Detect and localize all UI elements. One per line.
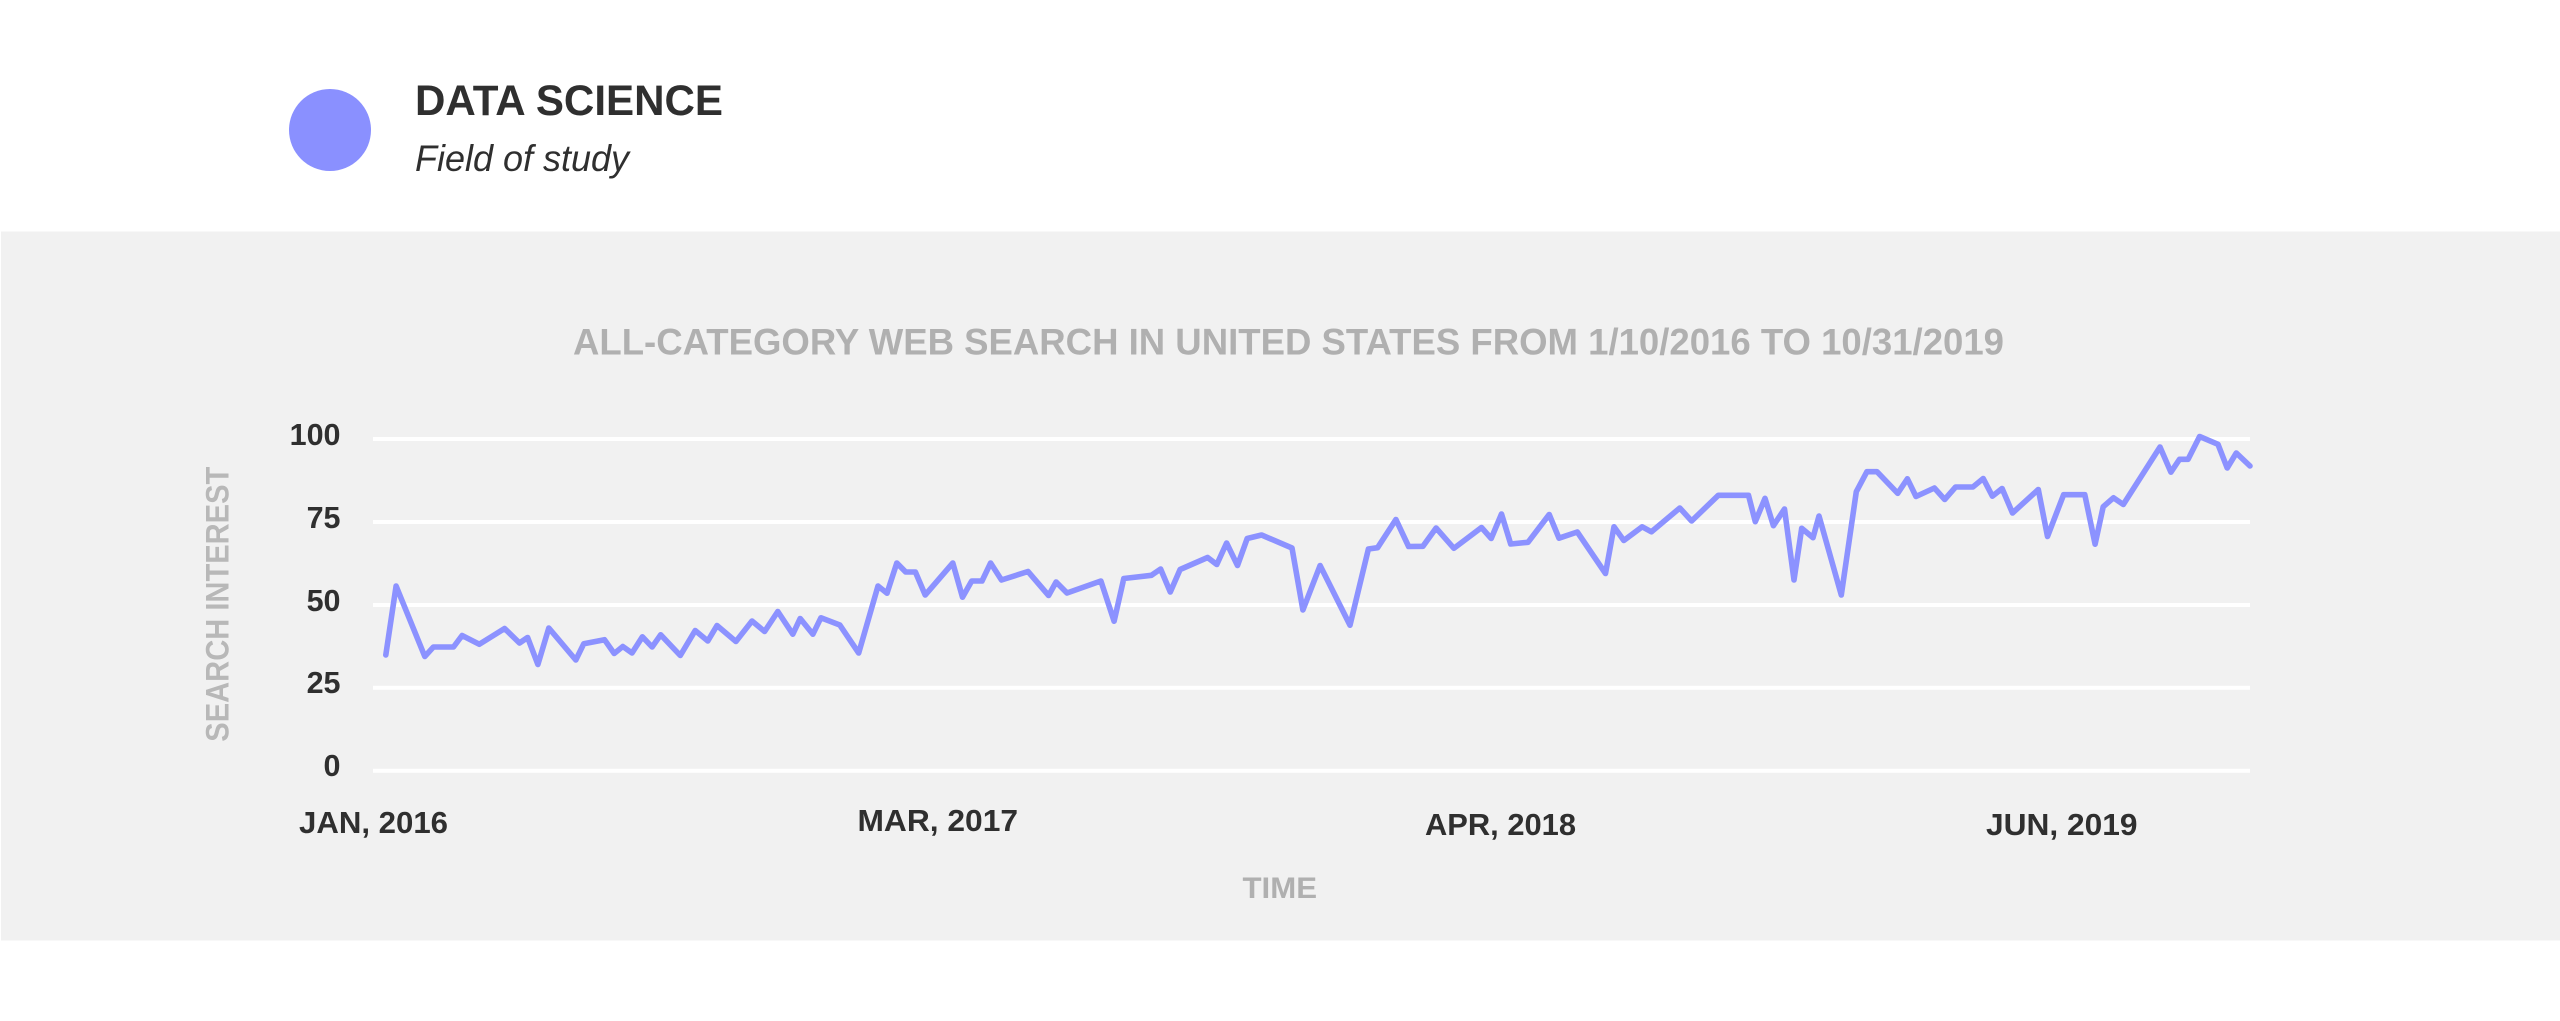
y-axis tick labels <box>290 418 341 783</box>
y-axis title: SEARCH INTEREST <box>200 466 236 742</box>
chart title: ALL-CATEGORY WEB SEARCH IN UNITED STATES FROM 1/10/2016 TO 10/31/2019 <box>573 320 2004 362</box>
y-axis tick labels: 100 <box>290 418 340 452</box>
x-axis tick labels: JAN, 2016 <box>299 806 448 840</box>
y-axis tick labels: 50 <box>307 584 340 618</box>
data line: search interest <box>386 436 2250 664</box>
x-axis title: TIME <box>1242 872 1317 905</box>
x-axis tick labels: APR, 2018 <box>1425 808 1576 842</box>
x-axis tick labels <box>299 804 2138 842</box>
x-axis tick labels: JUN, 2019 <box>1986 808 2138 842</box>
icon: legend circle <box>289 89 371 171</box>
grid lines <box>373 439 2250 771</box>
heading: data science: DATA SCIENCE <box>415 77 723 125</box>
y-axis tick labels: 25 <box>307 666 341 700</box>
line chart <box>200 418 2250 905</box>
panel: chart background <box>1 232 2560 940</box>
subheading: field of study: Field of study <box>415 138 631 179</box>
x-axis tick labels: MAR, 2017 <box>858 804 1018 838</box>
y-axis tick labels: 75 <box>307 501 341 535</box>
y-axis tick labels: 0 <box>324 749 340 783</box>
